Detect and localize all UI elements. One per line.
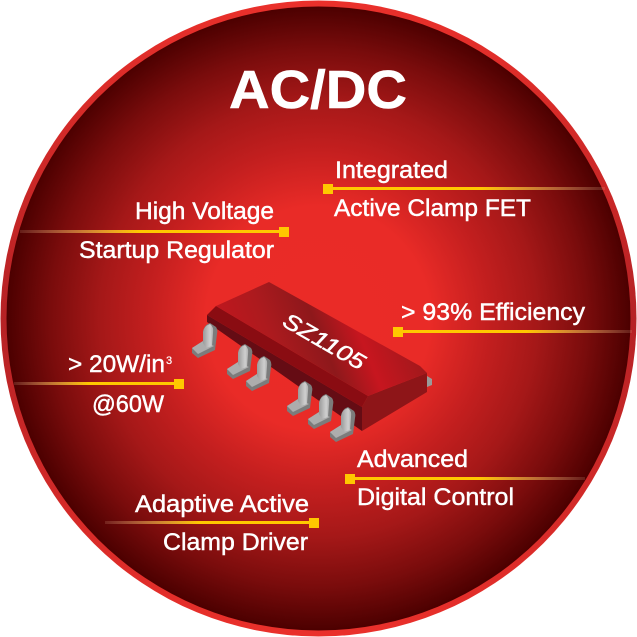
- chip top face: [216, 282, 427, 396]
- icon: chip pins: [192, 323, 355, 442]
- callout: adaptive active clamp driver: [105, 491, 319, 556]
- title: AC/DC: [229, 60, 407, 120]
- callout: power density: 3: [166, 355, 172, 367]
- callout: efficiency: > 93% Efficiency: [401, 299, 585, 326]
- callout: power density: @60W: [92, 391, 164, 418]
- icon: back pin: [427, 376, 432, 387]
- callout: high voltage startup regulator: Startup Regulator: [79, 237, 274, 264]
- callout: integrated active clamp FET: Active Clamp FET: [334, 195, 531, 222]
- callout: advanced digital control: Advanced: [357, 446, 468, 473]
- chip front side: [207, 315, 362, 431]
- callout: efficiency: [393, 299, 632, 337]
- chip illustration: [192, 282, 432, 442]
- callout: integrated active clamp FET: Integrated: [335, 157, 448, 184]
- callout: advanced digital control: [345, 446, 585, 511]
- chip end side: [362, 373, 427, 431]
- chip label: SZ1105: [278, 308, 371, 375]
- callout: power density: > 20W/in: [68, 351, 165, 378]
- callout: adaptive active clamp driver: Clamp Driver: [163, 529, 308, 556]
- callout: high voltage startup regulator: High Voltage: [135, 198, 274, 225]
- chip front bevel: [207, 306, 368, 407]
- callout: power density: [14, 351, 184, 418]
- callout: adaptive active clamp driver: Adaptive Active: [135, 491, 309, 518]
- callout: high voltage startup regulator: [20, 198, 289, 264]
- callout: integrated active clamp FET: [323, 157, 605, 222]
- callout: advanced digital control: Digital Control: [357, 484, 514, 511]
